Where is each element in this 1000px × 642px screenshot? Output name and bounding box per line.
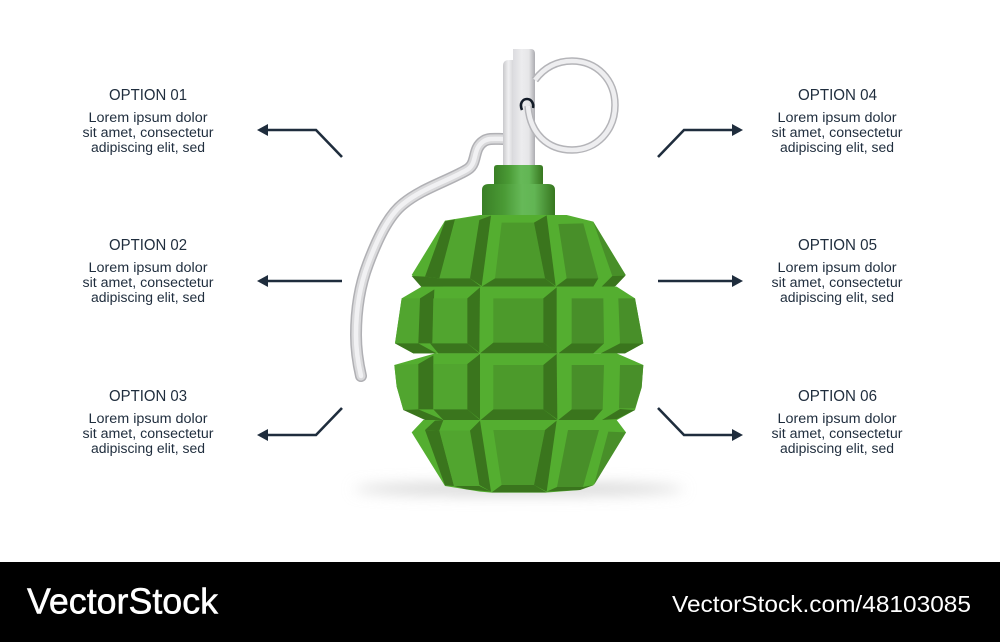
grenade	[356, 49, 643, 493]
text block: option 03: adipiscing elit, sed	[91, 441, 205, 456]
arrow: option 06	[658, 408, 743, 441]
text block: option 05	[772, 237, 903, 305]
body row 1	[412, 215, 626, 287]
footer bar	[0, 562, 1000, 642]
safety lever	[356, 139, 505, 376]
text block: option 06: sit amet, consectetur	[772, 426, 903, 441]
footer url: VectorStock.com/48103085	[672, 591, 971, 617]
footer logo: VectorStock	[27, 580, 219, 622]
arrow: option 02	[257, 275, 342, 287]
text block: option 03: OPTION 03	[109, 388, 187, 405]
body row 3	[394, 353, 643, 420]
text block: option 04	[772, 87, 903, 155]
upper neck	[494, 165, 543, 186]
text block: option 04: Lorem ipsum dolor	[778, 110, 897, 125]
text block: option 05: adipiscing elit, sed	[780, 290, 894, 305]
text block: option 05: OPTION 05	[798, 237, 877, 254]
text block: option 06: Lorem ipsum dolor	[778, 411, 897, 426]
arrow: option 04	[658, 124, 743, 157]
text block: option 02	[82, 237, 214, 305]
text block: option 03	[82, 388, 214, 456]
text block: option 01: OPTION 01	[109, 87, 187, 104]
text block: option 04: adipiscing elit, sed	[780, 140, 894, 155]
body row 2	[395, 287, 643, 353]
grenade body	[394, 215, 643, 493]
text block: option 01: Lorem ipsum dolor	[88, 110, 208, 125]
text block: option 06	[772, 388, 903, 456]
narrow striker tube	[503, 60, 514, 165]
text block: option 04: sit amet, consectetur	[772, 125, 903, 140]
text block: option 01: adipiscing elit, sed	[91, 140, 205, 155]
arrow: option 03	[257, 408, 342, 441]
arrow: option 01	[257, 124, 342, 157]
text block: option 05: Lorem ipsum dolor	[778, 260, 897, 275]
text block: option 04: OPTION 04	[798, 87, 877, 104]
text block: option 01: sit amet, consectetur	[82, 125, 214, 140]
text block: option 06: OPTION 06	[798, 388, 877, 405]
pull ring	[528, 61, 615, 150]
text block: option 03: sit amet, consectetur	[82, 426, 214, 441]
body row 4	[412, 420, 626, 493]
text block: option 05: sit amet, consectetur	[772, 275, 903, 290]
ring hole	[521, 99, 533, 110]
lower neck	[482, 184, 555, 216]
text block: option 02: sit amet, consectetur	[82, 275, 214, 290]
ground shadow	[354, 483, 684, 495]
text block: option 06: adipiscing elit, sed	[780, 441, 894, 456]
text block: option 03: Lorem ipsum dolor	[88, 411, 208, 426]
wide striker tube	[513, 49, 535, 165]
arrow: option 05	[658, 275, 743, 287]
text block: option 02: OPTION 02	[109, 237, 187, 254]
text block: option 02: adipiscing elit, sed	[91, 290, 205, 305]
text block: option 01	[82, 87, 214, 155]
text block: option 02: Lorem ipsum dolor	[88, 260, 208, 275]
